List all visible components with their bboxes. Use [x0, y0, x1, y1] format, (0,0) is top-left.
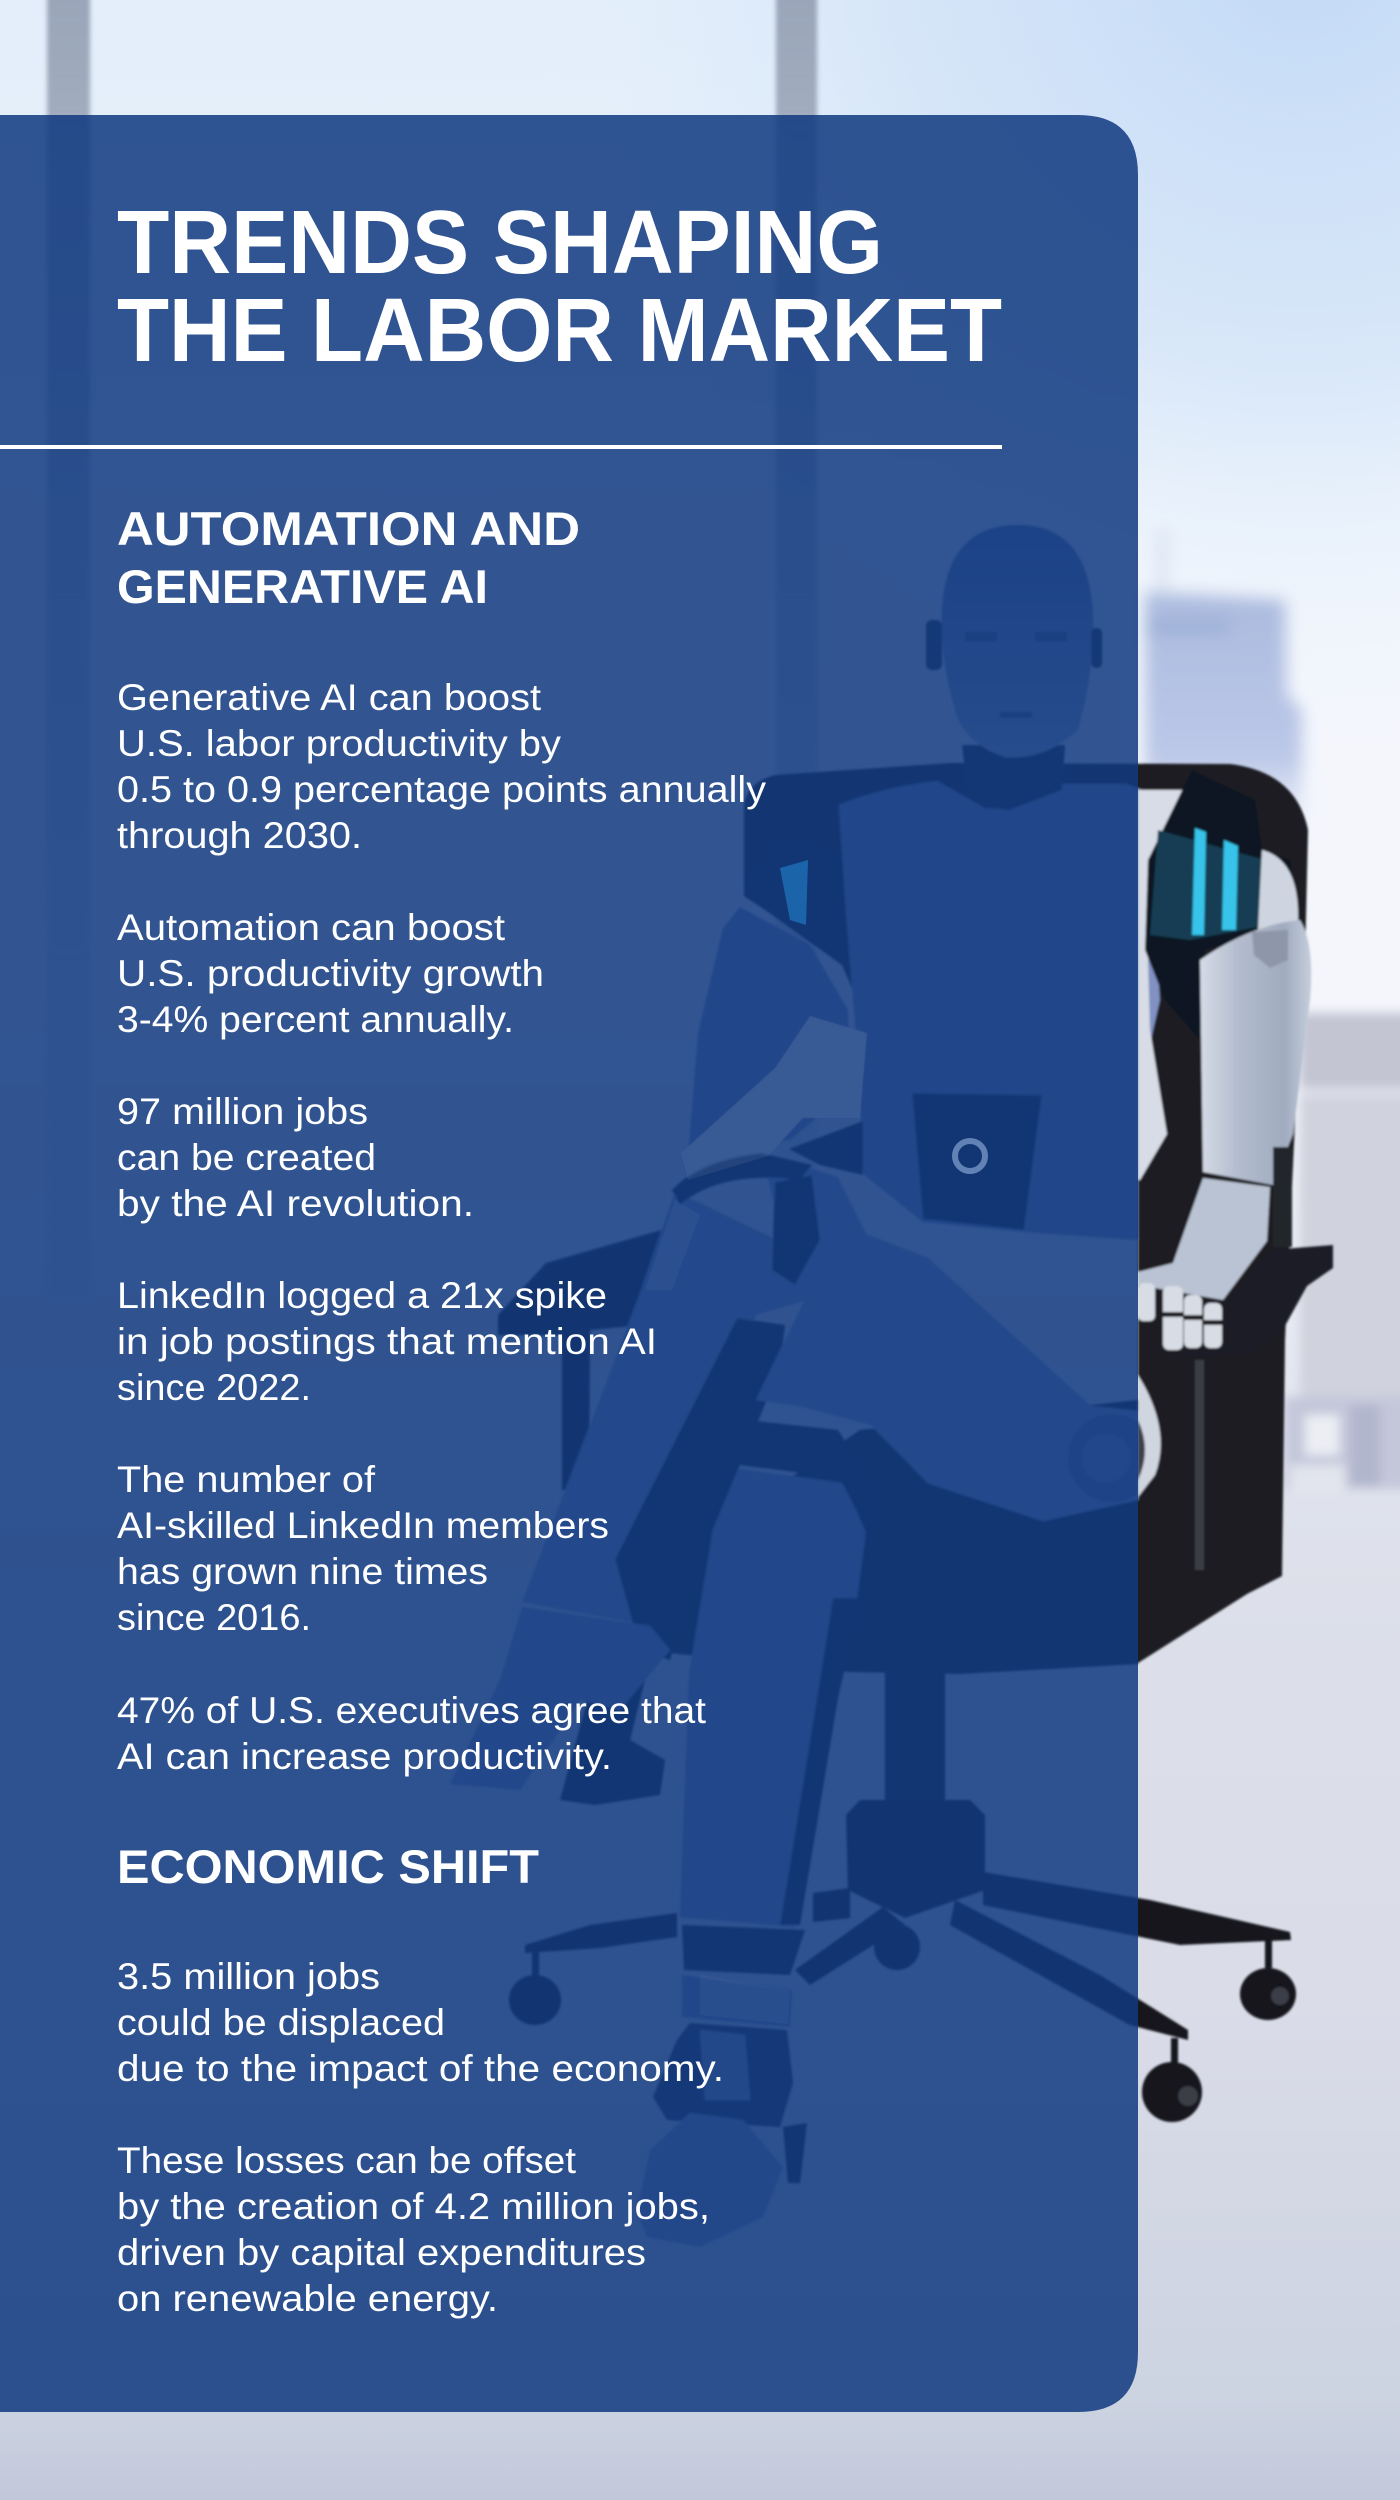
title: TRENDS SHAPING — [117, 193, 883, 293]
text block: LinkedIn job postings — [117, 1275, 657, 1408]
title — [117, 193, 1002, 381]
crossed thigh — [756, 1153, 1138, 1521]
text block: automation productivity: U.S. productivity growth — [117, 953, 544, 994]
text block: jobs displaced — [117, 1956, 724, 2089]
head — [941, 525, 1093, 757]
text block: generative AI productivity: through 2030. — [117, 815, 362, 856]
text block: AI-skilled members: AI-skilled LinkedIn members — [117, 1505, 609, 1546]
foot — [783, 2123, 807, 2183]
text block: generative AI productivity: U.S. labor productivity by — [117, 723, 562, 764]
knee strap — [672, 1153, 812, 1205]
left foot — [560, 1660, 665, 1805]
leg guard — [780, 1598, 861, 1925]
text block: jobs displaced: could be displaced — [117, 2002, 445, 2043]
torso — [839, 781, 1160, 1240]
thigh band — [718, 1420, 871, 1545]
heading: automation and generative AI: GENERATIVE AI — [117, 560, 488, 613]
armrest — [1177, 1245, 1333, 1359]
left shin — [522, 1191, 804, 1626]
text block: AI-skilled members: since 2016. — [117, 1597, 311, 1638]
text block: AI-skilled members: The number of — [117, 1459, 376, 1500]
seat — [615, 1400, 1138, 1674]
sofa in the background — [1285, 1013, 1400, 1493]
text block: jobs created: 97 million jobs — [117, 1091, 368, 1132]
lower leg — [680, 1468, 866, 1927]
text block: LinkedIn job postings: LinkedIn logged a 21x spike — [117, 1275, 607, 1316]
right forearm — [1138, 1178, 1270, 1300]
text block: jobs created — [117, 1091, 474, 1224]
right hand — [1138, 1283, 1222, 1350]
panel highlights on robot — [645, 860, 985, 2024]
blue translucent panel — [0, 115, 1138, 2412]
left upper arm — [688, 907, 850, 1156]
text block: jobs offset: driven by capital expenditures — [117, 2232, 646, 2273]
text block: executives: 47% of U.S. executives agree that — [117, 1690, 707, 1731]
text block: jobs displaced: due to the impact of the economy. — [117, 2048, 724, 2089]
text block: automation productivity: Automation can boost — [117, 907, 506, 948]
text block: jobs displaced: 3.5 million jobs — [117, 1956, 380, 1997]
chair column — [885, 1668, 945, 1808]
face — [965, 632, 1067, 718]
text block: jobs offset — [117, 2140, 710, 2319]
robot in office chair — [450, 525, 1333, 2247]
gap behind hand — [789, 1121, 863, 1175]
left shoulder joint — [744, 840, 842, 965]
text block: jobs created: by the AI revolution. — [117, 1183, 474, 1224]
text block: executives — [117, 1690, 707, 1777]
left forearm and hand — [681, 1016, 867, 1180]
text block: generative AI productivity: Generative AI can boost — [117, 677, 542, 718]
right shoulder cavity — [1145, 770, 1300, 1040]
distant building — [1145, 530, 1302, 830]
text block: jobs created: can be created — [117, 1137, 376, 1178]
text block: LinkedIn job postings: since 2022. — [117, 1367, 311, 1408]
armrest post — [1273, 1147, 1292, 1247]
right side of torso — [1138, 790, 1190, 1180]
text block: LinkedIn job postings: in job postings that mention AI — [117, 1321, 657, 1362]
belly core — [912, 1093, 1042, 1230]
right upper arm — [1200, 920, 1311, 1185]
chair base legs — [525, 1872, 1291, 2040]
text block: generative AI productivity — [117, 677, 767, 856]
text block: automation productivity — [117, 907, 544, 1040]
heading: economic shift: ECONOMIC SHIFT — [117, 1840, 539, 1893]
ankle stripes — [682, 1925, 805, 1975]
title divider — [0, 445, 1002, 449]
left armrest and post — [498, 1229, 700, 1490]
ankle rings — [682, 1975, 792, 2027]
text block: AI-skilled members: has grown nine times — [117, 1551, 488, 1592]
knee silver — [1138, 1375, 1161, 1497]
text block: jobs offset: These losses can be offset — [117, 2140, 577, 2181]
text block: jobs offset: by the creation of 4.2 million jobs, — [117, 2186, 710, 2227]
neck — [962, 745, 1065, 810]
ankle — [653, 2023, 793, 2127]
text block: jobs offset: on renewable energy. — [117, 2278, 498, 2319]
text block: automation productivity: 3-4% percent annually. — [117, 999, 514, 1040]
heading: automation and generative AI — [117, 502, 580, 613]
window pillars — [47, 0, 817, 1300]
heading: automation and generative AI: AUTOMATION AND — [117, 502, 580, 555]
chair back — [744, 763, 1308, 1663]
text block: executives: AI can increase productivity. — [117, 1736, 612, 1777]
title: THE LABOR MARKET — [117, 281, 1002, 381]
text block: generative AI productivity: 0.5 to 0.9 percentage points annually — [117, 769, 767, 810]
chair lower rod — [1195, 1360, 1204, 1570]
casters — [509, 1924, 1296, 2122]
knee joint — [1068, 1414, 1156, 1502]
text block: AI-skilled members — [117, 1459, 609, 1638]
